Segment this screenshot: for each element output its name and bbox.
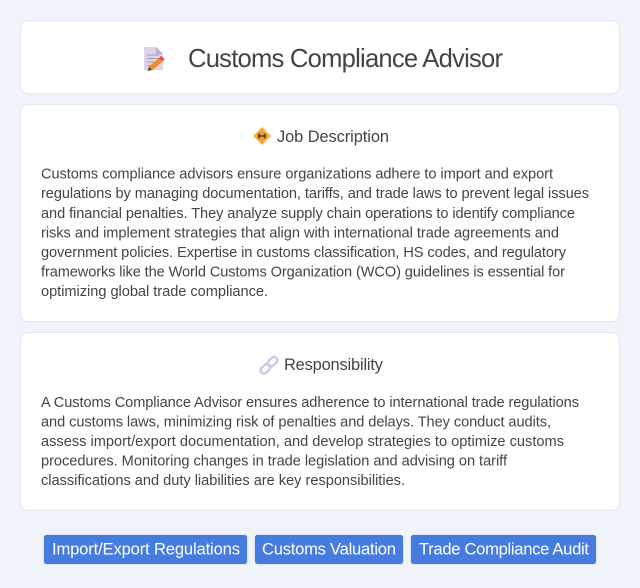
tag: import/export regulations: Import/Export Regulations <box>52 540 240 558</box>
text block: responsibility: assess import/export documentation, and develop strategies to optimize customs <box>41 434 564 450</box>
panel: responsibility <box>20 332 620 510</box>
skill tags <box>44 534 596 564</box>
text block: job description: Customs compliance advisors ensure organizations adhere to import and export <box>41 166 553 182</box>
text block: responsibility: procedures. Monitoring changes in trade legislation and advising on tariff <box>41 454 508 470</box>
icon: document with pencil <box>144 47 163 71</box>
tag: customs valuation: Customs Valuation <box>262 540 396 558</box>
text block: job description: government policies. Expertise in customs classification, HS codes, and regulatory <box>41 245 567 261</box>
tag: customs valuation <box>254 534 404 564</box>
text block: job description: and financial penalties. They analyze supply chain operations to identify compliance <box>41 206 575 222</box>
text block: responsibility: and customs laws, minimizing risk of penalties and delays. They conduct audits, <box>41 414 551 430</box>
text block: job description: optimizing global trade compliance. <box>41 284 268 300</box>
icon: orange diamond <box>253 127 271 145</box>
text block: responsibility: A Customs Compliance Advisor ensures adherence to international trade regulations <box>41 395 579 411</box>
tag: trade compliance audit <box>410 534 596 564</box>
title: Customs Compliance Advisor <box>188 45 503 73</box>
text block: job description <box>41 166 589 300</box>
heading: responsibility: Responsibility <box>284 356 384 374</box>
text block: responsibility: classifications and duty liabilities are key responsibilities. <box>41 473 405 489</box>
panel: title header <box>20 20 620 94</box>
tag: trade compliance audit: Trade Compliance Audit <box>419 540 589 558</box>
panel: job description <box>20 104 620 322</box>
text block: job description: regulations by managing documentation, tariffs, and trade laws to prevent legal issues <box>41 186 589 202</box>
text block: job description: frameworks like the World Customs Organization (WCO) guidelines is essential for <box>41 264 565 280</box>
text block: job description: risks and implement strategies that align with international trade agreements and <box>41 226 559 242</box>
tag: import/export regulations <box>44 534 248 564</box>
icon: chain link <box>259 356 279 375</box>
text block: responsibility <box>41 395 579 489</box>
heading: job description: Job Description <box>277 128 389 146</box>
